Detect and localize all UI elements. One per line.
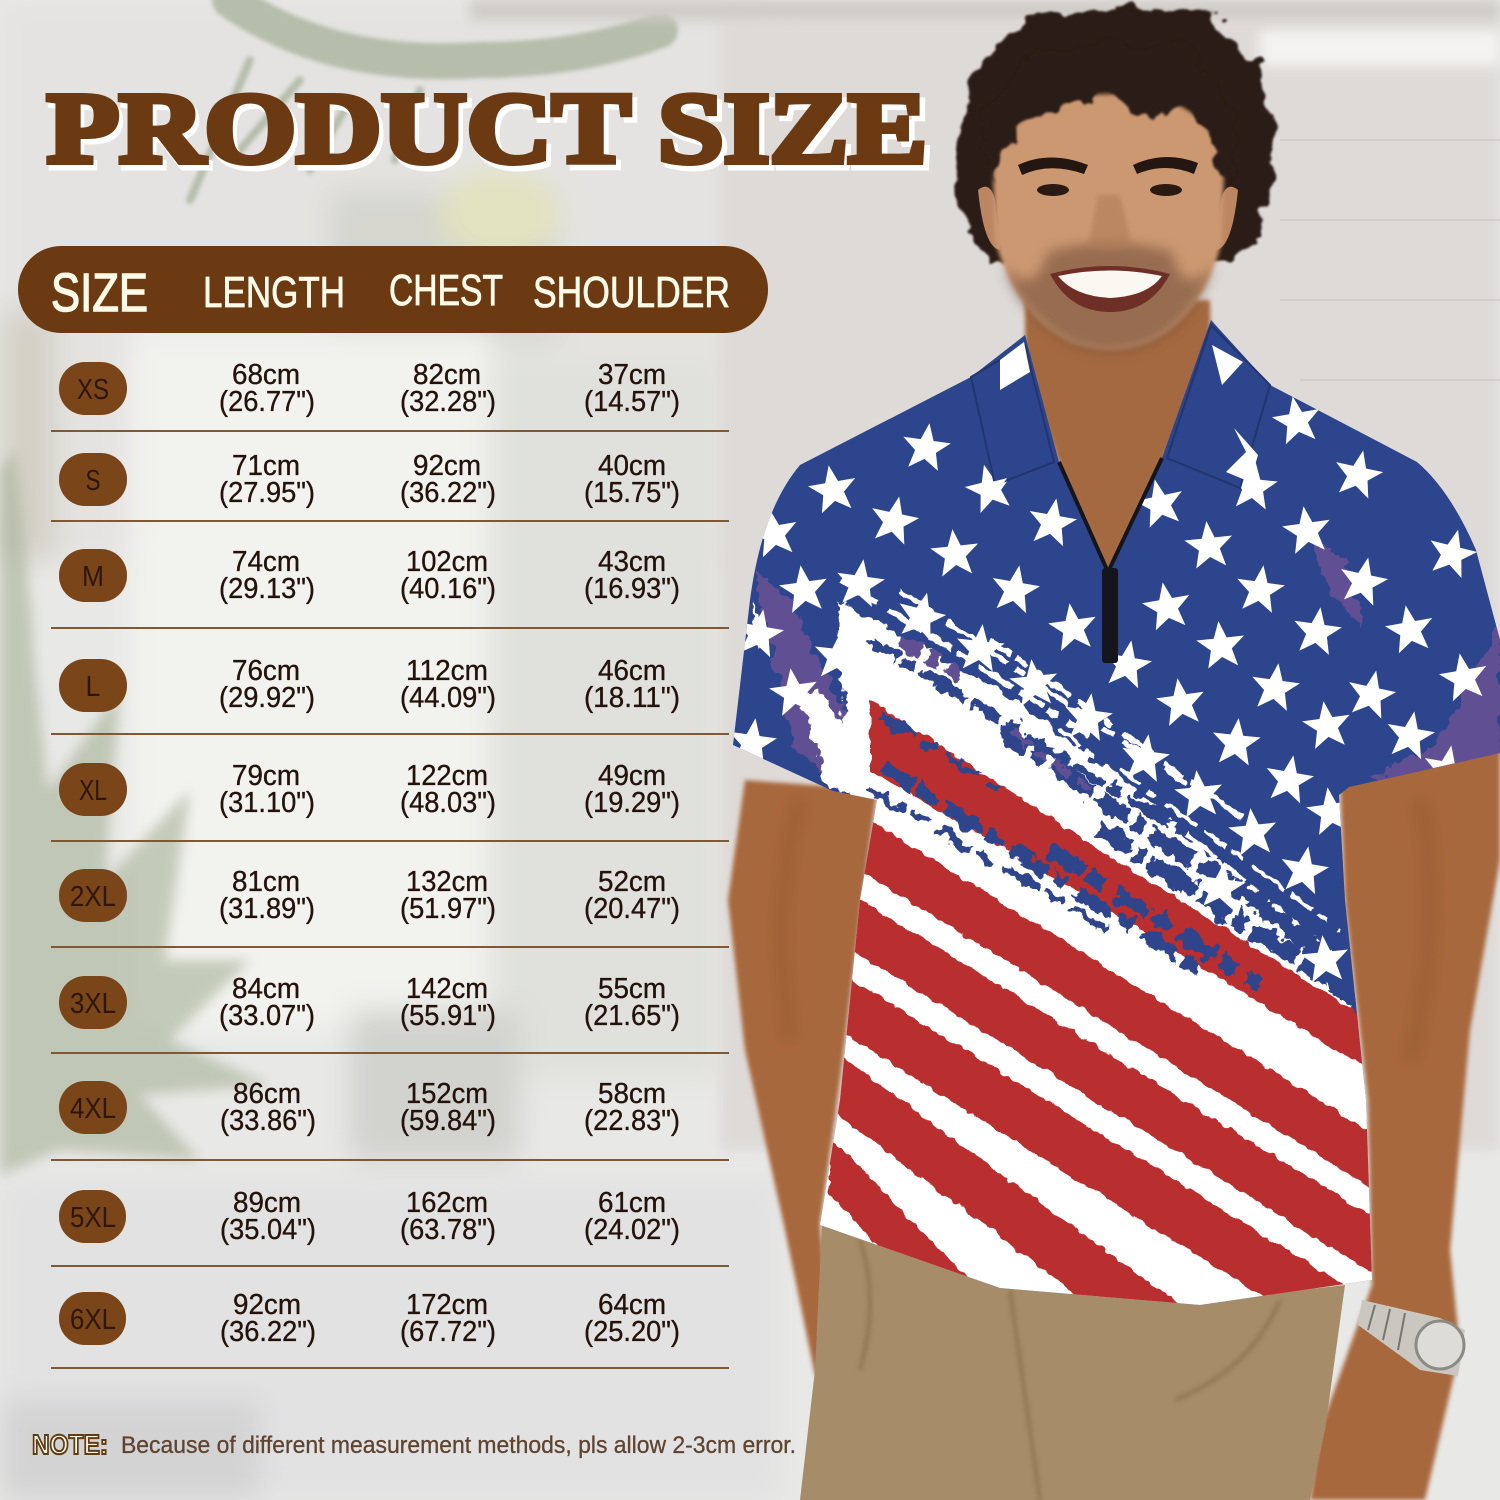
- chest 4XL: (59.84"): [400, 1105, 496, 1137]
- chest 3XL: (55.91"): [400, 1000, 496, 1032]
- shoulder L: 46cm: [598, 655, 666, 687]
- shoulder M: [584, 546, 680, 605]
- shoulder 6XL: 64cm: [598, 1289, 666, 1321]
- length 5XL: [220, 1187, 316, 1246]
- size badge 6XL: [59, 1292, 126, 1345]
- blue brush streaks: [870, 640, 1360, 1000]
- length L: 76cm: [232, 655, 300, 687]
- row: XL: [59, 760, 680, 819]
- chest XL: 122cm: [406, 760, 488, 792]
- chest 4XL: 152cm: [406, 1078, 488, 1110]
- chest 6XL: 172cm: [406, 1289, 488, 1321]
- eyes: [1037, 184, 1182, 196]
- size badge 4XL: [59, 1081, 127, 1134]
- length 2XL: 81cm: [232, 866, 300, 898]
- hair fringe: [982, 38, 1236, 185]
- size badge S: S: [86, 465, 100, 497]
- ears: [978, 187, 1238, 250]
- size badge 5XL: [59, 1190, 126, 1243]
- size badge M: M: [82, 561, 104, 593]
- shoulder 3XL: (21.65"): [584, 1000, 680, 1032]
- chest XL: [400, 760, 496, 819]
- red stripes: [830, 700, 1400, 1320]
- chest 3XL: 142cm: [406, 973, 488, 1005]
- table header: [18, 246, 768, 333]
- length M: 74cm: [232, 546, 300, 578]
- shoulder L: [584, 655, 680, 714]
- chest 2XL: 132cm: [406, 866, 488, 898]
- left collar: [967, 342, 1054, 510]
- shoulder XS: (14.57"): [584, 386, 680, 418]
- shoulder 2XL: 52cm: [598, 866, 666, 898]
- chest S: 92cm: [413, 450, 481, 482]
- row: XS: [59, 359, 680, 418]
- white brush streaks: [840, 580, 1340, 960]
- row: L: [59, 655, 680, 714]
- chest 5XL: [400, 1187, 496, 1246]
- size badge 2XL: [59, 869, 127, 922]
- row: 4XL: [59, 1078, 680, 1137]
- length 3XL: 84cm: [232, 973, 300, 1005]
- chest XS: [400, 359, 496, 418]
- shoulder L: (18.11"): [584, 682, 680, 714]
- title: PRODUCT SIZE: [50, 77, 932, 189]
- shoulder S: [584, 450, 680, 509]
- size badge 4XL: 4XL: [70, 1093, 116, 1125]
- chest M: (40.16"): [400, 573, 496, 605]
- length 2XL: (31.89"): [219, 893, 315, 925]
- chest M: 102cm: [406, 546, 488, 578]
- chest S: (36.22"): [400, 477, 496, 509]
- shoulder M: (16.93"): [584, 573, 680, 605]
- length 5XL: 89cm: [233, 1187, 301, 1219]
- shoulder XS: [584, 359, 680, 418]
- stars: [725, 392, 1491, 983]
- chest XL: (48.03"): [400, 787, 496, 819]
- eyebrows: [1018, 157, 1198, 175]
- chest 2XL: [400, 866, 496, 925]
- row dividers: [51, 431, 729, 1368]
- header: length: LENGTH: [203, 268, 345, 317]
- plants: [0, 450, 270, 1175]
- shirt: stars and stripes polo: [700, 300, 1500, 1330]
- white swath: [820, 601, 1372, 1305]
- shoulder M: 43cm: [598, 546, 666, 578]
- shirt base: [700, 300, 1500, 1320]
- shoulder 5XL: 61cm: [598, 1187, 666, 1219]
- row: S: [59, 450, 680, 509]
- size badge L: L: [86, 671, 100, 703]
- size badge 2XL: 2XL: [70, 881, 116, 913]
- chest 5XL: (63.78"): [400, 1214, 496, 1246]
- shoulder 5XL: [584, 1187, 680, 1246]
- chest 4XL: [400, 1078, 496, 1137]
- length 6XL: [220, 1289, 316, 1348]
- purple streaks: [898, 636, 1092, 791]
- man: left arm: [728, 780, 877, 1375]
- smile: [1050, 266, 1170, 312]
- shoulder 4XL: 58cm: [598, 1078, 666, 1110]
- length 5XL: (35.04"): [220, 1214, 316, 1246]
- chest 5XL: 162cm: [406, 1187, 488, 1219]
- length XL: 79cm: [232, 760, 300, 792]
- man: head: [955, 6, 1280, 352]
- size badge S: [59, 453, 127, 506]
- chest 6XL: (67.72"): [400, 1316, 496, 1348]
- note: [32, 1429, 796, 1460]
- zipper: [1059, 458, 1162, 663]
- header: size: SIZE: [51, 263, 148, 323]
- chest S: [400, 450, 496, 509]
- chest XS: (32.28"): [400, 386, 496, 418]
- length XL: (31.10"): [219, 787, 315, 819]
- shoulder 5XL: (24.02"): [584, 1214, 680, 1246]
- header: chest: CHEST: [389, 266, 503, 315]
- row: 6XL: [59, 1289, 680, 1348]
- stubble: [1003, 243, 1214, 352]
- shoulder 3XL: [584, 973, 680, 1032]
- shoulder 4XL: [584, 1078, 680, 1137]
- chest 3XL: [400, 973, 496, 1032]
- size badge XS: XS: [77, 374, 109, 406]
- length XL: [219, 760, 315, 819]
- blue streaks among red: [870, 715, 1260, 985]
- title: PRODUCT SIZE: [47, 72, 927, 184]
- size badge XL: XL: [79, 775, 107, 807]
- row: 3XL: [59, 973, 680, 1032]
- size badge 5XL: 5XL: [70, 1202, 116, 1234]
- white sleeve patches: [752, 600, 850, 794]
- shoulder S: (15.75"): [584, 477, 680, 509]
- length XS: 68cm: [232, 359, 300, 391]
- shoulder XL: (19.29"): [584, 787, 680, 819]
- length 4XL: 86cm: [233, 1078, 301, 1110]
- size badge XS: [59, 362, 127, 415]
- length S: [219, 450, 315, 509]
- hair back: [955, 6, 1280, 262]
- length 4XL: [220, 1078, 316, 1137]
- chest L: (44.09"): [400, 682, 496, 714]
- chest L: 112cm: [406, 655, 488, 687]
- chest L: [400, 655, 496, 714]
- header: shoulder: SHOULDER: [533, 268, 730, 317]
- size badge M: [59, 549, 127, 602]
- length L: (29.92"): [219, 682, 315, 714]
- size badge 3XL: [59, 976, 127, 1029]
- length 3XL: [219, 973, 315, 1032]
- length 2XL: [219, 866, 315, 925]
- chest 6XL: [400, 1289, 496, 1348]
- shoulder 4XL: (22.83"): [584, 1105, 680, 1137]
- shoulder 2XL: [584, 866, 680, 925]
- size badge 6XL: 6XL: [70, 1304, 116, 1336]
- row: M: [59, 546, 680, 605]
- length 6XL: 92cm: [233, 1289, 301, 1321]
- right collar: [1167, 325, 1270, 488]
- chest XS: 82cm: [413, 359, 481, 391]
- neck and chest: [1025, 300, 1211, 575]
- length 3XL: (33.07"): [219, 1000, 315, 1032]
- shoulder 6XL: [584, 1289, 680, 1348]
- row: 2XL: [59, 866, 680, 925]
- shoulder XL: 49cm: [598, 760, 666, 792]
- chest M: [400, 546, 496, 605]
- note label: NOTE:: [32, 1429, 108, 1460]
- face: [993, 94, 1224, 350]
- size badge L: [59, 659, 127, 712]
- length 4XL: (33.86"): [220, 1105, 316, 1137]
- shoulder 2XL: (20.47"): [584, 893, 680, 925]
- shoulder S: 40cm: [598, 450, 666, 482]
- man: trousers: [800, 1222, 1345, 1500]
- man: right arm and hand: [1310, 740, 1500, 1500]
- length M: (29.13"): [219, 573, 315, 605]
- size badge 3XL: 3XL: [70, 988, 116, 1020]
- shoulder XS: 37cm: [598, 359, 666, 391]
- shoulder XL: [584, 760, 680, 819]
- row: 5XL: [59, 1187, 680, 1246]
- length XS: [219, 359, 315, 418]
- length 6XL: (36.22"): [220, 1316, 316, 1348]
- size badge XL: [59, 763, 127, 816]
- note text: Because of different measurement methods, pls allow 2-3cm error.: [121, 1432, 796, 1459]
- shoulder 3XL: 55cm: [598, 973, 666, 1005]
- right wall siding: [470, 0, 1500, 1150]
- length M: [219, 546, 315, 605]
- length S: (27.95"): [219, 477, 315, 509]
- nose: [1088, 195, 1132, 252]
- wristwatch: [1358, 1300, 1465, 1376]
- shoulder 6XL: (25.20"): [584, 1316, 680, 1348]
- purple sleeve strokes: [755, 535, 1500, 790]
- length L: [219, 655, 315, 714]
- chest 2XL: (51.97"): [400, 893, 496, 925]
- length XS: (26.77"): [219, 386, 315, 418]
- length S: 71cm: [232, 450, 300, 482]
